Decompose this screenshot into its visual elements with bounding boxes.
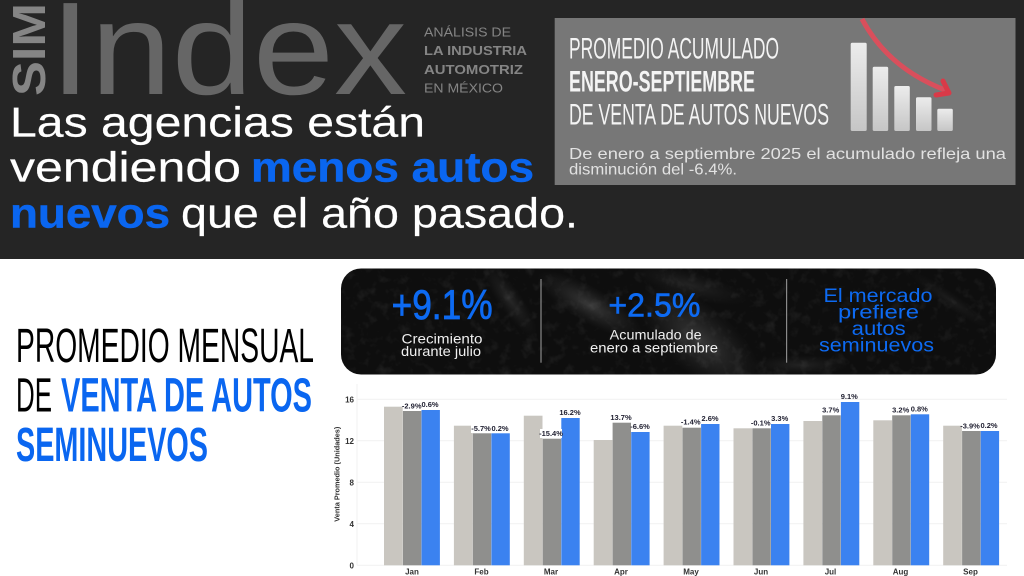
KPI: +9.1% <box>392 281 493 359</box>
KPI: mercado prefiere: seminuevos <box>819 336 934 357</box>
KPI: +2.5% <box>590 287 718 356</box>
value labels: 9.1% <box>841 392 858 401</box>
main headline: que el año pasado. <box>181 190 578 237</box>
panel heading: PROMEDIO ACUMULADO <box>569 33 779 66</box>
bar chart: venta promedio mensual <box>332 384 1007 576</box>
left heading: promedio mensual: VENTA DE AUTOS <box>61 370 312 423</box>
y axis ticks: 12 <box>345 437 355 446</box>
value labels: 0.8% <box>911 405 928 414</box>
y axis ticks: 0 <box>350 561 355 570</box>
main headline: nuevos <box>10 190 170 237</box>
main headline: Las agencias están <box>10 99 425 146</box>
left heading: promedio mensual <box>16 320 314 472</box>
header background <box>0 0 1024 259</box>
y axis ticks: 16 <box>345 395 355 404</box>
panel: KPI strip <box>341 268 996 374</box>
value labels <box>402 392 998 438</box>
KPI: mercado prefiere <box>819 286 934 357</box>
main headline: menos autos <box>251 144 534 191</box>
logo: SIM Index: SIM <box>3 3 55 96</box>
value labels: 3.2% <box>892 406 910 415</box>
value labels: 0.6% <box>421 400 439 409</box>
logo tagline: EN MÉXICO <box>424 81 503 96</box>
KPI: mercado prefiere: El mercado <box>824 286 932 307</box>
left heading: promedio mensual: DE <box>16 370 52 423</box>
value labels: -5.7% <box>471 424 491 433</box>
left heading: promedio mensual: PROMEDIO MENSUAL <box>16 320 314 373</box>
KPI: +2.5%: Acumulado de <box>610 326 702 342</box>
value labels: -15.4% <box>539 429 563 438</box>
KPI: +2.5%: +2.5% <box>608 287 700 324</box>
KPI: mercado prefiere: prefiere <box>838 303 919 324</box>
value labels: -3.9% <box>960 422 980 431</box>
KPI: mercado prefiere: autos <box>852 319 906 340</box>
value labels: -2.9% <box>402 402 422 411</box>
value labels: 16.2% <box>559 408 581 417</box>
main headline <box>10 99 578 237</box>
panel heading: ENERO-SEPTIEMBRE <box>569 65 755 98</box>
KPI: +9.1%: +9.1% <box>392 281 493 328</box>
left heading: promedio mensual: SEMINUEVOS <box>16 419 208 472</box>
value labels: 2.6% <box>701 414 719 423</box>
logo tagline <box>424 25 528 96</box>
logo tagline: AUTOMOTRIZ <box>424 62 523 77</box>
logo tagline: ANÁLISIS DE <box>424 25 511 40</box>
value labels: -1.4% <box>681 418 701 427</box>
main headline: vendiendo <box>10 144 241 191</box>
value labels: 0.2% <box>980 421 998 430</box>
value labels: 0.2% <box>491 424 509 433</box>
panel heading <box>569 33 829 132</box>
panel heading: DE VENTA DE AUTOS NUEVOS <box>569 99 829 132</box>
value labels: 13.7% <box>610 413 632 422</box>
y axis ticks: 8 <box>350 478 355 487</box>
month labels <box>405 568 978 576</box>
panel description <box>569 146 1006 179</box>
KPI: +2.5%: enero a septiembre <box>590 340 718 356</box>
panel description: De enero a septiembre 2025 el acumulado refleja una <box>569 146 1006 163</box>
panel: promedio acumulado <box>555 18 1016 185</box>
value labels: 3.3% <box>771 414 789 423</box>
value labels: 3.7% <box>822 406 840 415</box>
y axis title: Venta Promedio (Unidades) <box>332 426 342 522</box>
y axis ticks: 4 <box>350 520 355 529</box>
value labels: -6.6% <box>630 422 650 431</box>
y axis ticks <box>345 395 355 570</box>
panel description: disminución del -6.4%. <box>569 162 737 179</box>
logo tagline: LA INDUSTRIA <box>424 43 528 58</box>
icon: descending bars with red arrow <box>851 19 953 131</box>
bars <box>384 402 999 565</box>
KPI: +9.1%: Crecimiento <box>402 330 483 346</box>
KPI: +9.1%: durante julio <box>401 343 481 359</box>
value labels: -0.1% <box>751 419 771 428</box>
